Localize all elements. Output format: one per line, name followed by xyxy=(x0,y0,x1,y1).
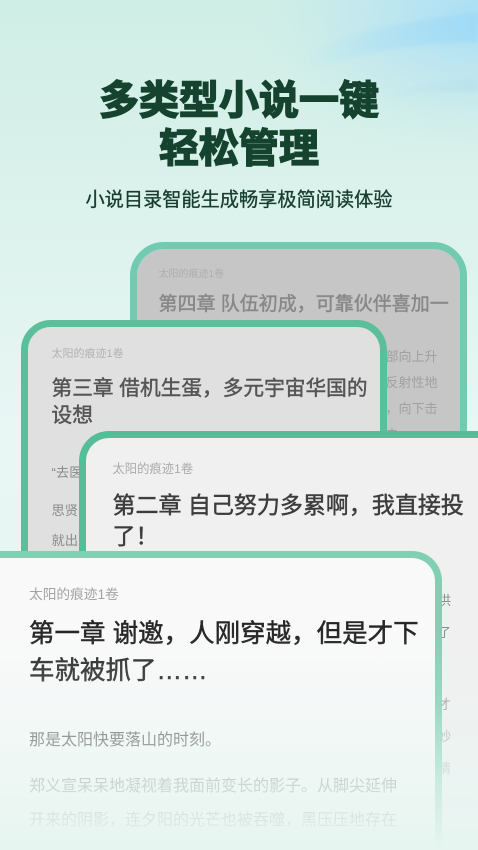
panel: chapter 2 card xyxy=(79,431,478,850)
card 1 chapter heading: 第一章 谢邀，人刚穿越，但是才下 xyxy=(29,620,419,648)
card 3 chapter heading: 设想 xyxy=(52,404,93,427)
card 4 body text: 打击 xyxy=(372,427,399,442)
card 3 book label: 太阳的痕迹1卷 xyxy=(52,348,124,360)
card 4 body text: 全反射性地 xyxy=(372,375,438,390)
card 2 body text xyxy=(438,593,451,776)
card 1 body paragraph: 郑义宣呆呆地凝视着我面前变长的影子。从脚尖延伸 xyxy=(29,778,397,795)
bottom fade overlay xyxy=(0,630,478,850)
card 4 body text: 眼部向上升 xyxy=(372,349,438,364)
card 4 body text xyxy=(372,349,438,442)
card 2 chapter heading: 了！ xyxy=(112,523,158,549)
card 2 body text: 妙 xyxy=(438,729,451,744)
card 3 body text: 就出发 xyxy=(52,533,91,548)
title: 多类型小说一键 xyxy=(99,79,379,123)
card 4 book label: 太阳的痕迹1卷 xyxy=(158,269,224,280)
card 2 book label: 太阳的痕迹1卷 xyxy=(112,462,193,476)
panel: chapter 4 card xyxy=(130,242,467,542)
card 3 body text: “去医 xyxy=(52,465,83,480)
title xyxy=(99,78,380,171)
card 1 body paragraph xyxy=(29,777,397,829)
subtitle: 小说目录智能生成畅享极简阅读体验 xyxy=(86,190,392,211)
card 1 book label: 太阳的痕迹1卷 xyxy=(29,587,119,602)
card 4 body text: 弯，向下击 xyxy=(372,401,438,416)
card 2 chapter heading xyxy=(112,492,464,549)
card 1 chapter heading xyxy=(29,620,419,685)
card 3 body text xyxy=(52,465,91,548)
title: 轻松管理 xyxy=(159,127,319,171)
card 2 body text: 供 xyxy=(438,593,451,608)
card 3 chapter heading xyxy=(52,377,368,427)
card 4 chapter heading: 第四章 队伍初成，可靠伙伴喜加一 xyxy=(158,294,449,315)
card 2 body text: 了 xyxy=(438,625,451,640)
card 1 body first line: 那是太阳快要落山的时刻。 xyxy=(29,732,221,749)
card 2 body text: 才 xyxy=(438,697,451,712)
card 3 chapter heading: 第三章 借机生蛋，多元宇宙华国的 xyxy=(52,377,368,400)
panel: chapter 3 card xyxy=(21,320,387,620)
card 2 body text: 情 xyxy=(438,761,451,776)
card 1 chapter heading: 车就被抓了…… xyxy=(29,657,208,685)
card 1 body paragraph: 开来的阴影，连夕阳的光芒也被吞噬，黑压压地存在 xyxy=(29,812,397,829)
card 2 chapter heading: 第二章 自己努力多累啊，我直接投 xyxy=(112,492,464,518)
card 3 body text: 思贤告 xyxy=(52,503,91,518)
background sky glow xyxy=(316,0,478,116)
panel: chapter 1 card xyxy=(0,551,442,850)
